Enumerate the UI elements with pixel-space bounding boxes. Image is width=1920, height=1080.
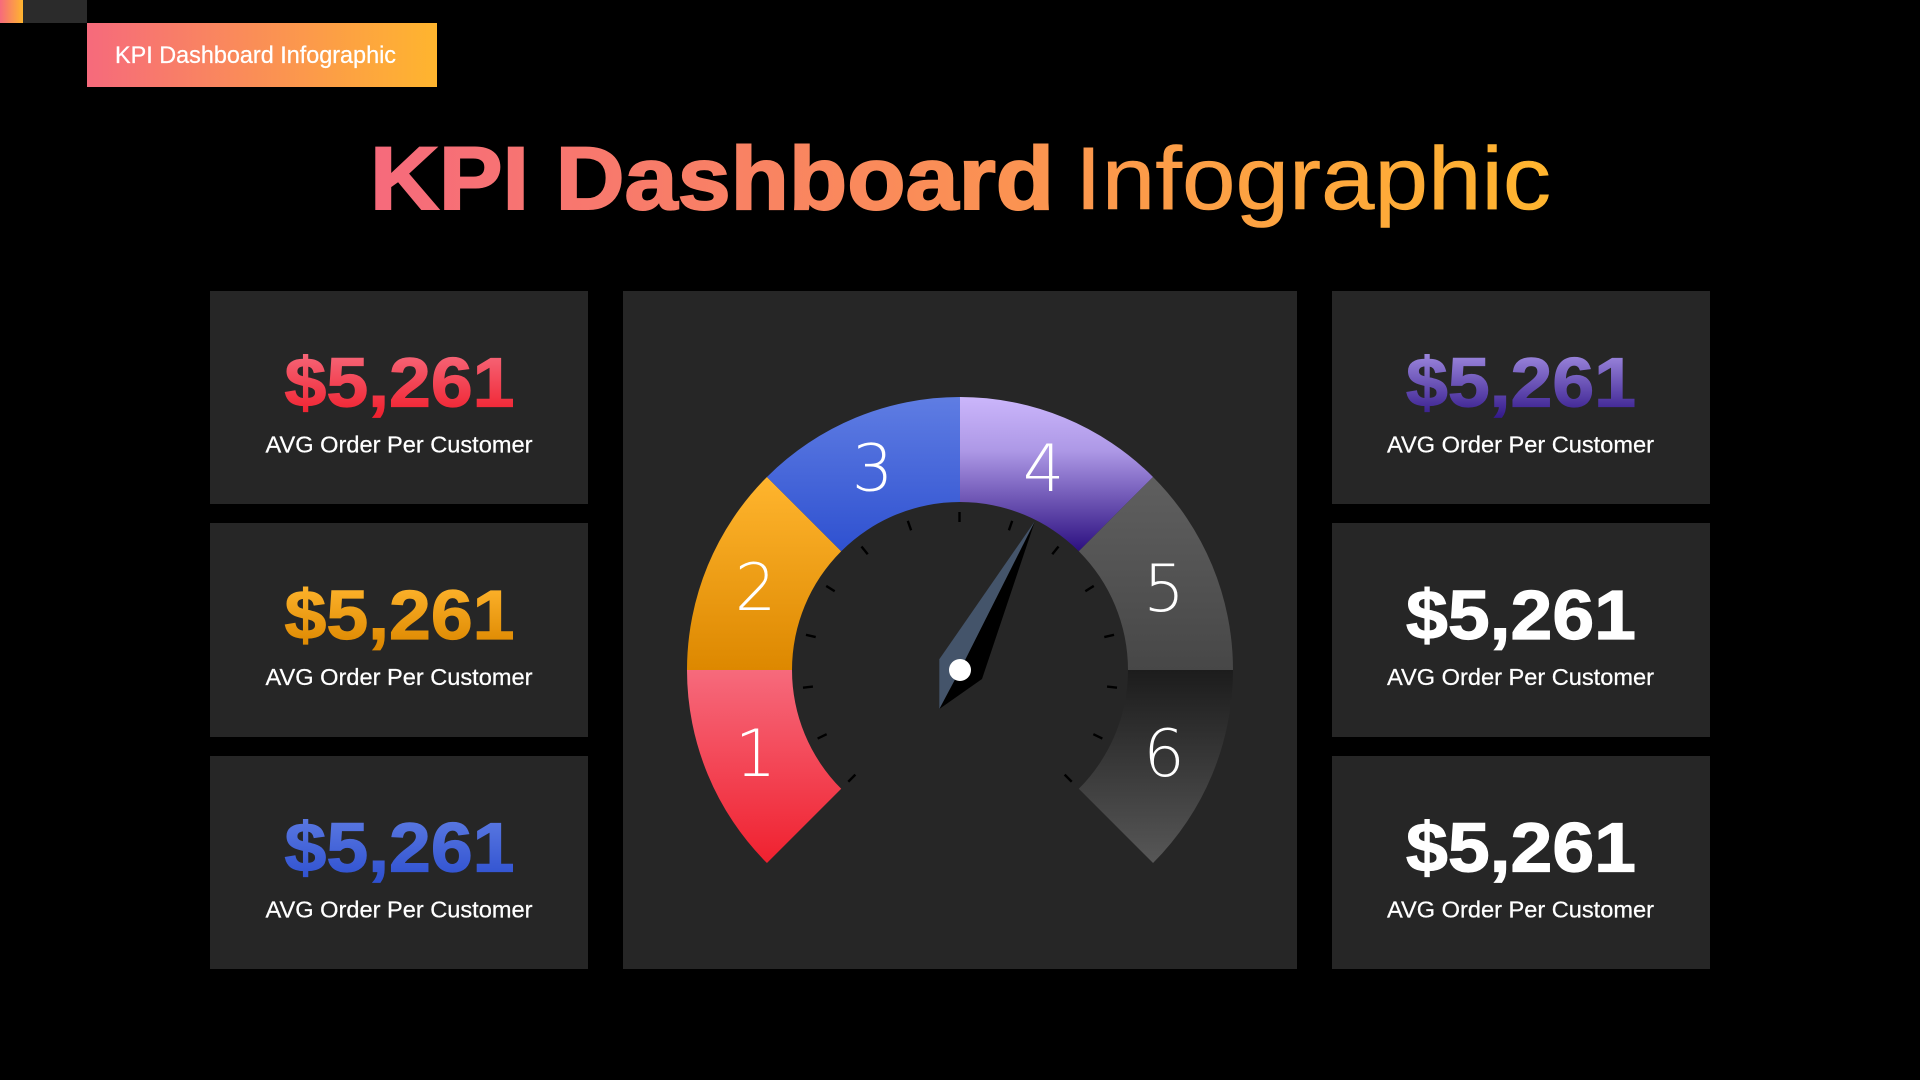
gauge segment 1 [687, 670, 841, 863]
panel: KPI card left 2: AVG Order Per Customer [266, 664, 533, 690]
title: KPI Dashboard [370, 128, 1054, 228]
gauge segment 4 [960, 397, 1153, 551]
panel: KPI card left 2 [210, 523, 588, 737]
gauge segment 3: 3 [852, 432, 893, 506]
panel: KPI card left 2: $5,261 [284, 576, 514, 654]
panel: gauge [623, 291, 1297, 969]
panel: KPI card right 1: AVG Order Per Customer [1387, 432, 1654, 458]
panel: KPI card right 3 [1332, 756, 1710, 969]
gauge segment 2 [687, 477, 841, 670]
header tag [87, 23, 437, 87]
header tag: KPI Dashboard Infographic [115, 42, 396, 69]
title: Infographic [1075, 128, 1551, 228]
panel: KPI card left 3: AVG Order Per Customer [266, 896, 533, 922]
gauge segment 1: 1 [735, 717, 776, 792]
panel: KPI card right 3: $5,261 [1406, 808, 1636, 886]
panel: KPI card left 1: $5,261 [284, 344, 514, 422]
panel: KPI card right 2 [1332, 523, 1710, 737]
gauge segment 6: 6 [1143, 717, 1185, 792]
panel: KPI card left 1: AVG Order Per Customer [266, 432, 533, 458]
gauge segment 4: 4 [1023, 432, 1064, 507]
panel: KPI card right 3: AVG Order Per Customer [1387, 896, 1654, 922]
panel: KPI card left 1 [210, 291, 588, 504]
gauge segment 2: 2 [735, 551, 776, 626]
panel: KPI card right 2: $5,261 [1406, 576, 1636, 654]
panel: KPI card right 1 [1332, 291, 1710, 504]
gauge tick marks [803, 512, 1117, 782]
panel: KPI card left 3 [210, 756, 588, 969]
gauge needle [939, 521, 1035, 709]
gauge segment 3 [767, 397, 960, 551]
gauge segment 5 [1079, 477, 1233, 670]
gauge segment 5: 5 [1143, 552, 1185, 627]
panel: KPI card right 1: $5,261 [1406, 344, 1636, 422]
gauge segment 6 [1079, 670, 1233, 863]
title [370, 128, 1551, 228]
panel: KPI card right 2: AVG Order Per Customer [1387, 664, 1654, 690]
panel: KPI card left 3: $5,261 [284, 808, 514, 886]
corner accent squares [0, 0, 87, 23]
